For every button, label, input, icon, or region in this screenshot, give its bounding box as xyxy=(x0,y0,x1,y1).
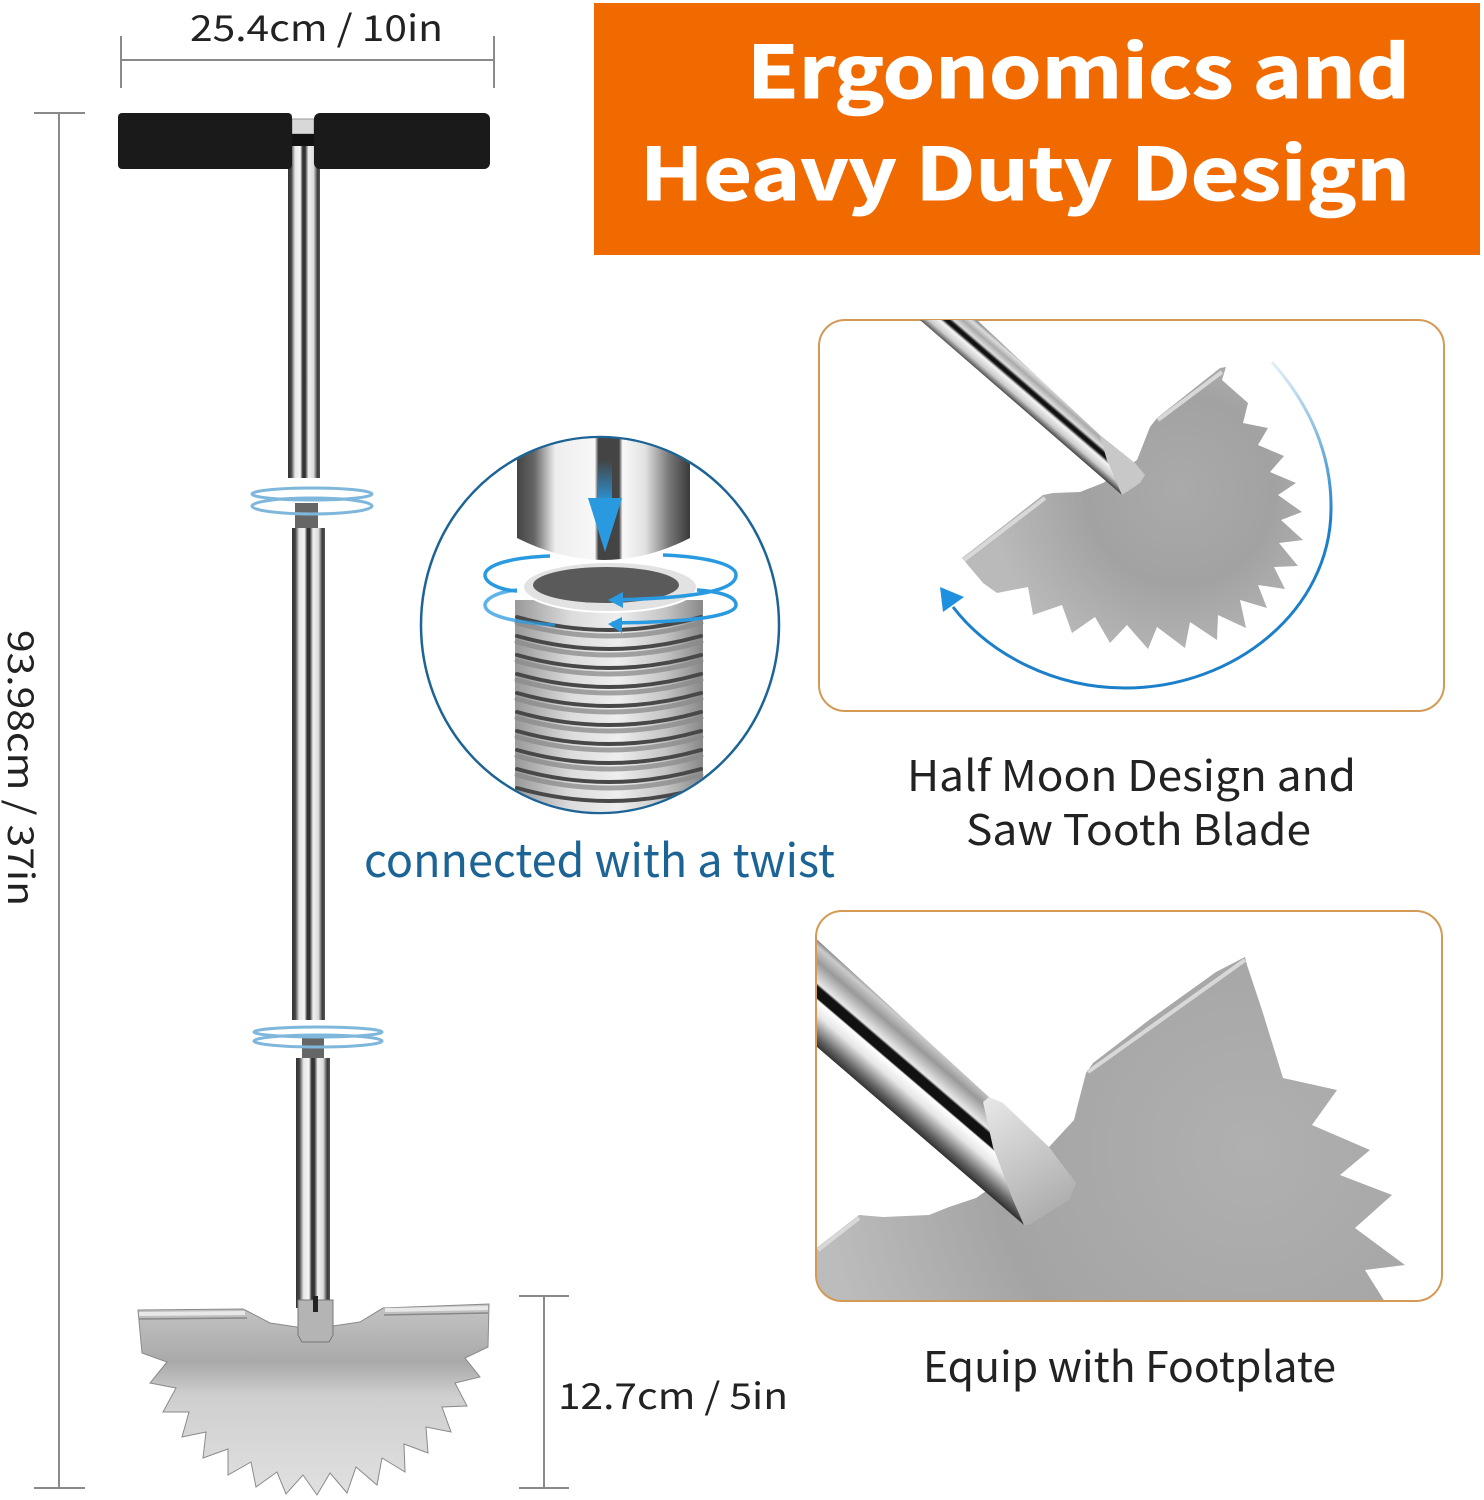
dimension: handle width: 25.4cm / 10in xyxy=(190,0,443,52)
caption: connected with a twist: connected with a twist xyxy=(364,825,835,891)
upper tube xyxy=(517,436,690,560)
caption: equip with footplate: Equip with Footplate xyxy=(923,1334,1336,1395)
upper joint thread xyxy=(295,503,318,528)
T-handle grip xyxy=(118,113,490,169)
lower twist rings xyxy=(254,1027,382,1047)
rotation arrowheads xyxy=(608,592,623,633)
title banner: Heavy Duty Design xyxy=(640,116,1410,221)
shaft xyxy=(920,320,1145,495)
upper twist rings xyxy=(252,488,372,514)
dimension: total height xyxy=(0,113,85,1488)
lower joint thread xyxy=(302,1038,324,1058)
caption: half moon design: Half Moon Design and xyxy=(907,743,1356,804)
shaft close-up xyxy=(810,933,1024,1225)
threaded tube xyxy=(515,562,703,815)
caption: half moon design: Saw Tooth Blade xyxy=(966,797,1311,858)
title banner: Ergonomics and xyxy=(747,14,1410,119)
caption: half moon design xyxy=(907,743,1356,858)
shaft cut end xyxy=(983,1097,1076,1225)
blue rotation arrow xyxy=(940,362,1331,688)
blade rotated view xyxy=(962,367,1303,649)
lower shaft xyxy=(296,1058,330,1308)
half moon saw blade xyxy=(138,1304,489,1495)
blade close-up xyxy=(810,957,1405,1310)
blue down arrow xyxy=(588,460,622,552)
title banner xyxy=(594,3,1480,255)
detail circle: threaded connection xyxy=(421,436,779,815)
dimension: handle width xyxy=(121,0,494,88)
shaft foot xyxy=(298,1296,333,1342)
dimension: blade height xyxy=(519,1296,788,1488)
panel: half moon blade xyxy=(819,320,1444,711)
blue twist rings xyxy=(485,555,736,625)
panel: footplate xyxy=(810,911,1442,1310)
dimension: blade height: 12.7cm / 5in xyxy=(558,1368,788,1420)
middle shaft xyxy=(292,528,325,1020)
upper shaft xyxy=(288,140,320,478)
tool: assembled edger xyxy=(118,113,490,1495)
